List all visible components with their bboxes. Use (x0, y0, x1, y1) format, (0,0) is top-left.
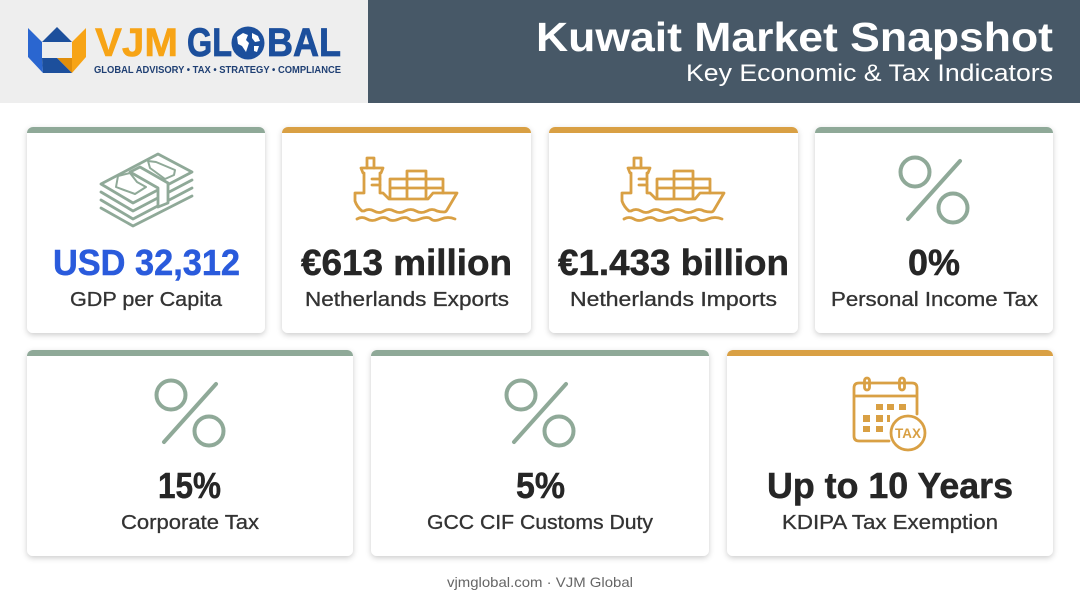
header: title panel (368, 0, 1080, 103)
card: personal income tax (815, 127, 1053, 333)
title: Kuwait Market Snapshot (536, 14, 1053, 60)
value: 0% (908, 242, 960, 283)
label: GDP per Capita (70, 289, 223, 311)
logo wordmark: GL (187, 21, 232, 65)
icon: cargo ship (355, 158, 457, 220)
icon: percent (900, 158, 968, 222)
label: KDIPA Tax Exemption (782, 512, 998, 534)
icon: money stack (101, 154, 192, 226)
label: Corporate Tax (121, 512, 259, 534)
card: KDIPA tax exemption (727, 350, 1053, 556)
icon: percent (156, 380, 224, 446)
logo wordmark: VJM (95, 21, 178, 65)
subtitle: Key Economic & Tax Indicators (686, 60, 1053, 87)
logo wordmark: BAL (267, 21, 341, 65)
value: 5% (516, 465, 565, 506)
logo: VJM Global (28, 21, 341, 76)
logo tagline: GLOBAL ADVISORY • TAX • STRATEGY • COMPLIANCE (94, 64, 341, 76)
header: logo panel (0, 0, 368, 103)
card: Netherlands imports (549, 127, 798, 333)
label: GCC CIF Customs Duty (427, 512, 653, 534)
logo wordmark (95, 21, 341, 65)
icon: tax calendar (854, 378, 925, 450)
value: USD 32,312 (53, 242, 240, 283)
label: Netherlands Imports (570, 289, 777, 311)
value: Up to 10 Years (767, 465, 1013, 506)
value: €613 million (301, 242, 512, 283)
icon: cargo ship (622, 158, 724, 220)
card: Netherlands exports (282, 127, 531, 333)
value: €1.433 billion (558, 242, 789, 283)
label: Personal Income Tax (831, 289, 1038, 311)
footer: vjmglobal.com · VJM Global (447, 574, 633, 590)
card: GDP per capita (27, 127, 265, 333)
icon: tax calendar: TAX (895, 425, 922, 441)
value: 15% (158, 465, 221, 506)
card: customs duty (371, 350, 709, 556)
card: corporate tax (27, 350, 353, 556)
label: Netherlands Exports (305, 289, 509, 311)
logo mark (28, 27, 86, 73)
icon: percent (506, 380, 574, 446)
